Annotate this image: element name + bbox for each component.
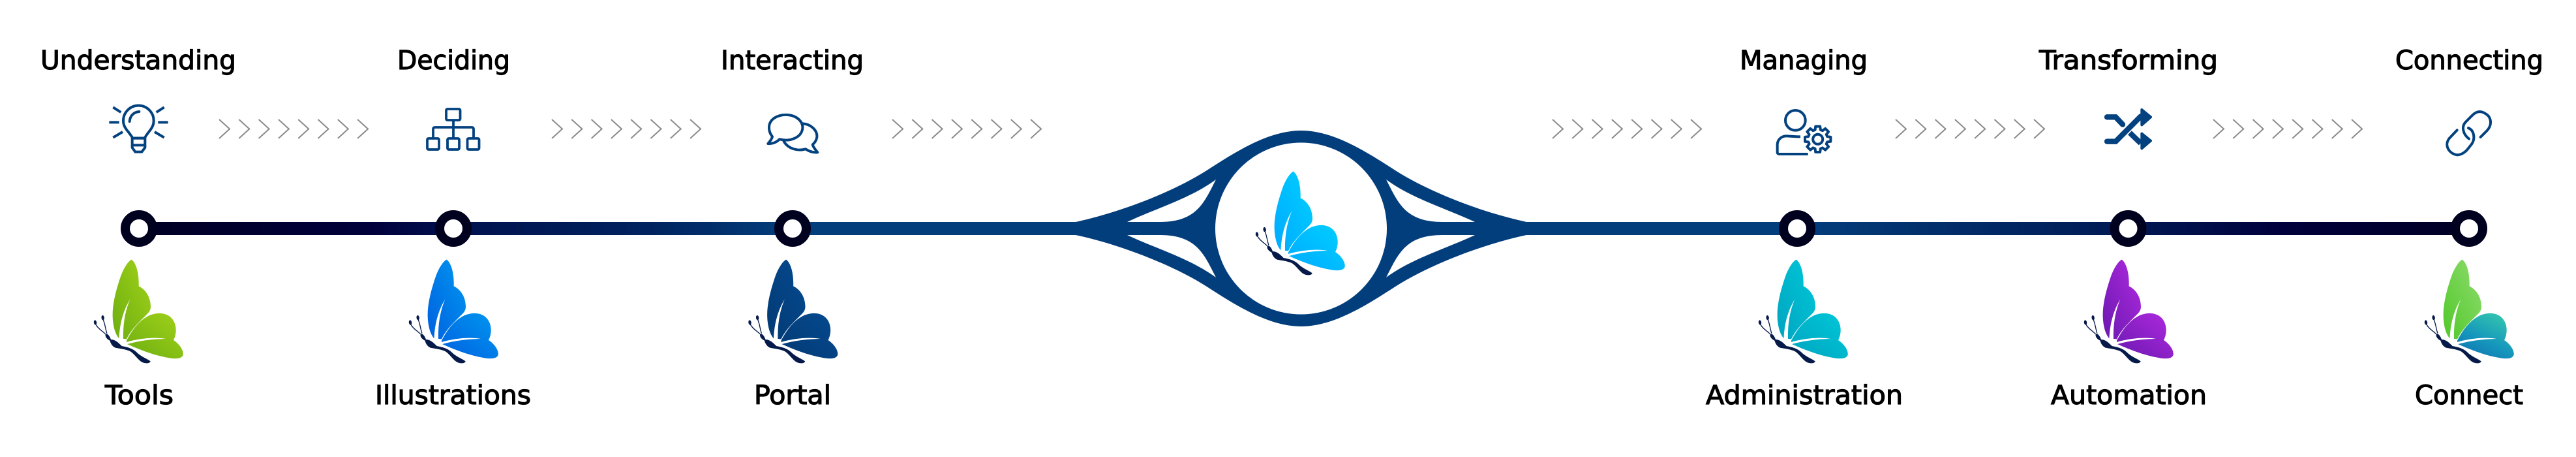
chevrons: Understanding to Deciding: [219, 119, 368, 138]
butterfly: Illustrations (blue): [408, 260, 498, 363]
chevrons: hub to Managing: [1553, 119, 1701, 138]
timeline line: [139, 222, 2469, 235]
node: Administration: [1783, 215, 1811, 242]
butterfly: Tools (green): [93, 260, 183, 363]
icon: user with gear: [1778, 110, 1830, 154]
central hub shape: [1076, 131, 1526, 326]
butterfly: Portal (navy): [748, 260, 838, 363]
butterfly: Automation (purple): [2084, 260, 2174, 363]
node: Tools: [125, 215, 153, 242]
chevrons: Interacting to hub: [892, 119, 1041, 138]
icon: chain link: [2447, 112, 2491, 155]
label: Administration: Administration: [1706, 381, 1903, 411]
heading: Connecting: Connecting: [2395, 46, 2543, 76]
butterfly: Administration (teal): [1758, 260, 1848, 363]
label: Tools: Tools: [104, 381, 174, 411]
icon: chat bubbles: [768, 115, 817, 152]
central butterfly: [1255, 172, 1345, 275]
label: Portal: Portal: [754, 381, 831, 411]
icon: light bulb: [109, 106, 168, 152]
label: Connect: Connect: [2415, 381, 2523, 411]
heading: Interacting: Interacting: [721, 46, 864, 76]
icon: hierarchy: [427, 109, 479, 150]
icon: shuffle: [2107, 110, 2151, 148]
chevrons: Managing to Transforming: [1896, 119, 2044, 138]
heading: Managing: Managing: [1740, 46, 1868, 76]
node: Automation: [2115, 215, 2142, 242]
heading: Understanding: Understanding: [40, 46, 236, 76]
node: Illustrations: [440, 215, 467, 242]
butterfly: Connect (green to blue): [2424, 260, 2514, 363]
chevrons: Deciding to Interacting: [552, 119, 701, 138]
heading: Transforming: Transforming: [2038, 46, 2218, 76]
heading: Deciding: Deciding: [397, 46, 510, 76]
label: Automation: Automation: [2051, 381, 2207, 411]
node: Connect: [2455, 215, 2483, 242]
node: Portal: [779, 215, 806, 242]
chevrons: Transforming to Connecting: [2213, 119, 2362, 138]
label: Illustrations: Illustrations: [375, 381, 531, 411]
